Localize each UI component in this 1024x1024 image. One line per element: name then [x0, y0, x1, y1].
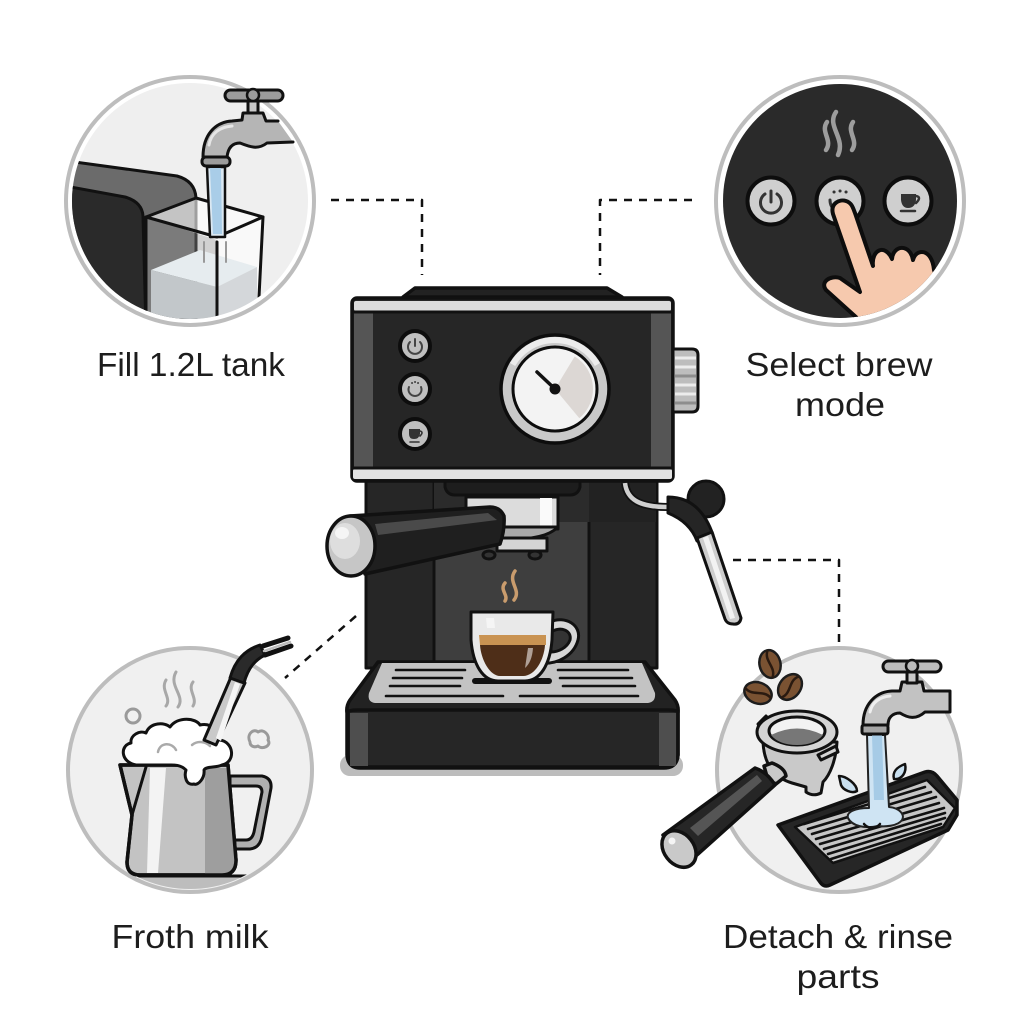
machine side	[72, 161, 198, 319]
side knob	[673, 349, 698, 412]
droplets	[839, 764, 905, 792]
portafilter handle	[327, 507, 504, 576]
steam icon	[164, 672, 194, 707]
label: select brew mode: Select brew	[746, 346, 933, 383]
espresso cup	[471, 612, 579, 681]
milk pitcher handle	[230, 776, 271, 849]
panel: select brew mode	[716, 77, 964, 340]
water stream	[848, 735, 903, 828]
circle frame	[68, 648, 312, 892]
panel: fill tank	[60, 77, 314, 330]
panel: froth milk	[60, 638, 320, 896]
button: steam	[400, 374, 430, 404]
label: detach and rinse line 2: parts	[796, 958, 880, 995]
dashed connector: rinse parts to machine	[733, 560, 839, 642]
coffee steam	[503, 571, 516, 601]
button: steam	[816, 178, 864, 224]
portafilter basket	[757, 711, 838, 795]
steam icon	[825, 112, 854, 155]
grate slots	[386, 670, 638, 696]
hand pressing button	[822, 198, 936, 318]
button: power	[748, 178, 794, 224]
dashed connector: brew mode to machine	[600, 200, 692, 275]
circle frame	[717, 648, 961, 892]
steam wand	[204, 638, 291, 745]
upper body	[352, 288, 673, 481]
label: froth milk: Froth milk	[112, 918, 269, 955]
bubbles	[126, 709, 269, 748]
panel: espresso machine	[327, 288, 741, 776]
water stream	[204, 167, 226, 262]
milk foam	[123, 719, 232, 784]
pressure gauge	[501, 335, 609, 443]
portafilter handle	[655, 763, 786, 874]
steam wand	[625, 481, 741, 624]
circle frame	[716, 77, 964, 325]
panel: detach and rinse	[655, 648, 961, 892]
label: fill tank: Fill 1.2L tank	[97, 346, 285, 383]
group head	[445, 480, 580, 559]
lower column	[366, 478, 657, 668]
coffee beans	[741, 648, 807, 708]
milk pitcher	[120, 765, 236, 875]
button: power	[400, 331, 430, 361]
machine shadow	[340, 755, 683, 776]
drip tray	[778, 772, 957, 886]
table surface	[137, 874, 247, 889]
label: detach and rinse: Detach & rinse	[723, 918, 953, 955]
button: cup	[884, 178, 932, 224]
drip tray	[347, 662, 678, 768]
faucet	[862, 660, 950, 734]
circle frame	[66, 77, 314, 325]
tray slats	[804, 787, 945, 859]
button: cup	[400, 419, 430, 449]
espresso machine infographic	[64, 75, 966, 995]
faucet	[202, 89, 293, 166]
dashed connector: froth milk to machine	[285, 616, 356, 678]
dashed connector: tank to machine	[331, 200, 422, 275]
label: select brew mode line 2: mode	[795, 386, 885, 423]
water tank	[146, 198, 263, 330]
